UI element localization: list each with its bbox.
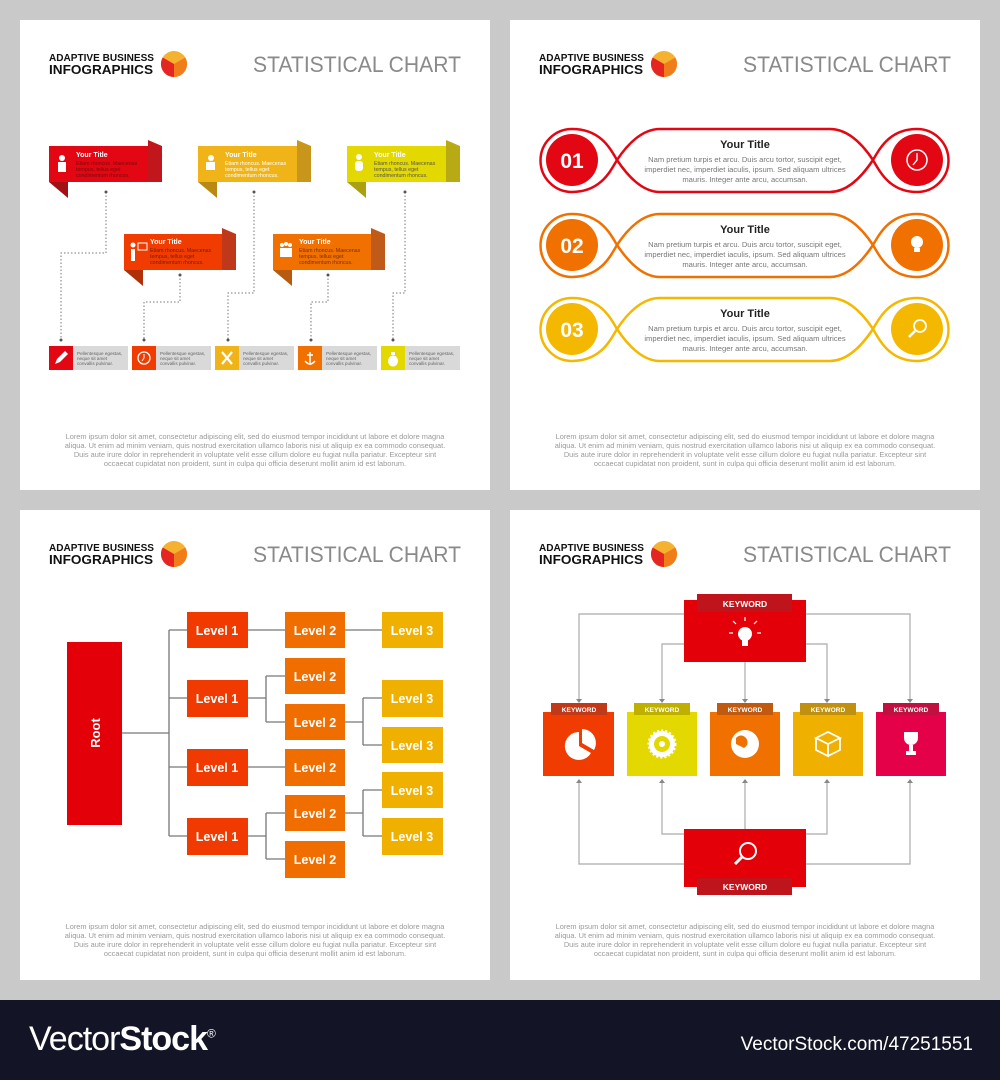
step 03 bbox=[540, 298, 948, 361]
ribbon 2 amber: condimentum rhoncus. bbox=[225, 173, 279, 179]
step 01: 01 bbox=[560, 150, 584, 173]
level boxes: Level 1 bbox=[196, 692, 238, 706]
ribbon 4 orange-red: tempus, tellus eget bbox=[150, 254, 195, 260]
step 03: Your Title bbox=[720, 308, 770, 320]
ribbon 5 orange: condimentum rhoncus. bbox=[299, 260, 353, 266]
mid keyword boxes: KEYWORD bbox=[645, 707, 679, 714]
step 02: Your Title bbox=[720, 224, 770, 236]
bottom legend items: neque sit amet bbox=[326, 356, 357, 361]
bottom legend items: neque sit amet bbox=[160, 356, 191, 361]
panel: keyword flow bbox=[510, 510, 980, 980]
level boxes: Level 2 bbox=[294, 807, 336, 821]
ribbon 5 orange: Your Title bbox=[299, 239, 331, 246]
heading: STATISTICAL CHART bbox=[743, 542, 951, 567]
footer text: Lorem ipsum dolor sit amet, consectetur adipiscing elit, sed do eiusmod tempor incididunt ut labore et dolore magna bbox=[556, 922, 935, 931]
root bbox=[67, 642, 122, 825]
ribbon 3 yellow: Your Title bbox=[374, 152, 406, 159]
connectors bbox=[122, 630, 382, 859]
step 01: Nam pretium turpis et arcu. Duis arcu tortor, suscipit eget, bbox=[648, 155, 842, 164]
ribbon 4 orange-red: condimentum rhoncus. bbox=[150, 260, 204, 266]
bottom legend items: convallis pulvinar. bbox=[243, 361, 279, 366]
footer text bbox=[65, 922, 445, 958]
bottom keyword box: KEYWORD bbox=[723, 882, 767, 892]
ribbon 1 red: Your Title bbox=[76, 152, 108, 159]
bottom legend items: neque sit amet bbox=[77, 356, 108, 361]
mid keyword boxes: KEYWORD bbox=[894, 707, 928, 714]
ribbon 4 orange-red: Etiam rhoncus. Maecenas bbox=[150, 248, 212, 254]
step 01: Your Title bbox=[720, 139, 770, 151]
footer text: occaecat cupidatat non proident, sunt in culpa qui officia deserunt mollit anim id est laborum. bbox=[594, 949, 896, 958]
level boxes: Level 2 bbox=[294, 670, 336, 684]
footer text: Lorem ipsum dolor sit amet, consectetur adipiscing elit, sed do eiusmod tempor incididunt ut labore et dolore magna bbox=[556, 432, 935, 441]
panel: infinity steps bbox=[510, 20, 980, 490]
step 01: mauris. Integer ante arcu, accumsan. bbox=[682, 175, 808, 184]
watermark bar bbox=[0, 1000, 1000, 1080]
step 03: Nam pretium turpis et arcu. Duis arcu tortor, suscipit eget, bbox=[648, 324, 842, 333]
footer text: aliqua. Ut enim ad minim veniam, quis nostrud exercitation ullamco laboris nisi ut aliquip ex ea commodo consequat. bbox=[555, 441, 935, 450]
heading: STATISTICAL CHART bbox=[253, 542, 461, 567]
ribbon 3 yellow: Etiam rhoncus. Maecenas bbox=[374, 161, 436, 167]
level boxes: Level 1 bbox=[196, 761, 238, 775]
level boxes: Level 3 bbox=[391, 830, 433, 844]
header logo: ADAPTIVE BUSINESS bbox=[539, 53, 644, 64]
bottom legend items: Pellentesque egestas, bbox=[77, 351, 122, 356]
header logo: ADAPTIVE BUSINESS bbox=[49, 53, 154, 64]
footer text: occaecat cupidatat non proident, sunt in culpa qui officia deserunt mollit anim id est laborum. bbox=[104, 459, 406, 468]
level boxes: Level 1 bbox=[196, 830, 238, 844]
step 03: 03 bbox=[560, 319, 584, 342]
footer text: Lorem ipsum dolor sit amet, consectetur adipiscing elit, sed do eiusmod tempor incididunt ut labore et dolore magna bbox=[66, 922, 445, 931]
footer text: aliqua. Ut enim ad minim veniam, quis nostrud exercitation ullamco laboris nisi ut aliquip ex ea commodo consequat. bbox=[65, 931, 445, 940]
bottom legend items: convallis pulvinar. bbox=[409, 361, 445, 366]
step 02: imperdiet nec, imperdiet iaculis, ipsum. Sed aliquam ultrices bbox=[644, 250, 846, 259]
bottom legend items: convallis pulvinar. bbox=[77, 361, 113, 366]
bottom legend items: Pellentesque egestas, bbox=[160, 351, 205, 356]
ribbon 5 orange: Etiam rhoncus. Maecenas bbox=[299, 248, 361, 254]
step 02 bbox=[540, 214, 948, 277]
header logo: ADAPTIVE BUSINESS bbox=[49, 543, 154, 554]
level boxes bbox=[187, 612, 443, 878]
ribbon 1 red: Etiam rhoncus. Maecenas bbox=[76, 161, 138, 167]
heading: STATISTICAL CHART bbox=[743, 52, 951, 77]
panel: ribbon timeline bbox=[20, 20, 490, 490]
header logo bbox=[539, 51, 677, 77]
bottom legend items: neque sit amet bbox=[409, 356, 440, 361]
ribbon 1 red bbox=[49, 140, 162, 198]
ribbon 3 yellow: condimentum rhoncus. bbox=[374, 173, 428, 179]
mid keyword boxes: KEYWORD bbox=[562, 707, 596, 714]
watermark logo: VectorStock® bbox=[29, 1020, 215, 1058]
panel: tree hierarchy bbox=[20, 510, 490, 980]
footer text bbox=[65, 432, 445, 468]
footer text: occaecat cupidatat non proident, sunt in culpa qui officia deserunt mollit anim id est laborum. bbox=[104, 949, 406, 958]
bottom legend items: neque sit amet bbox=[243, 356, 274, 361]
heading: STATISTICAL CHART bbox=[253, 52, 461, 77]
footer text: Duis aute irure dolor in reprehenderit in voluptate velit esse cillum dolore eu fugiat nulla pariatur. Excepteur sint bbox=[74, 450, 436, 459]
step 02: Nam pretium turpis et arcu. Duis arcu tortor, suscipit eget, bbox=[648, 240, 842, 249]
footer text bbox=[555, 432, 935, 468]
header logo bbox=[539, 541, 677, 567]
header logo: ADAPTIVE BUSINESS bbox=[539, 543, 644, 554]
bottom legend items: convallis pulvinar. bbox=[326, 361, 362, 366]
footer text: occaecat cupidatat non proident, sunt in culpa qui officia deserunt mollit anim id est laborum. bbox=[594, 459, 896, 468]
footer text: aliqua. Ut enim ad minim veniam, quis nostrud exercitation ullamco laboris nisi ut aliquip ex ea commodo consequat. bbox=[65, 441, 445, 450]
step 03: mauris. Integer ante arcu, accumsan. bbox=[682, 344, 808, 353]
header logo: INFOGRAPHICS bbox=[49, 552, 153, 567]
header logo bbox=[49, 51, 187, 77]
footer text bbox=[555, 922, 935, 958]
bottom legend items: Pellentesque egestas, bbox=[243, 351, 288, 356]
bottom legend items: Pellentesque egestas, bbox=[409, 351, 454, 356]
root: Root bbox=[88, 718, 103, 748]
mid keyword boxes: KEYWORD bbox=[728, 707, 762, 714]
mid keyword boxes: KEYWORD bbox=[811, 707, 845, 714]
bottom legend items: Pellentesque egestas, bbox=[326, 351, 371, 356]
ribbon 4 orange-red bbox=[124, 228, 236, 286]
watermark url: VectorStock.com/47251551 bbox=[741, 1034, 973, 1055]
footer text: Duis aute irure dolor in reprehenderit in voluptate velit esse cillum dolore eu fugiat nulla pariatur. Excepteur sint bbox=[564, 450, 926, 459]
step 01 bbox=[540, 129, 948, 192]
mid keyword boxes bbox=[543, 703, 946, 776]
footer text: Duis aute irure dolor in reprehenderit in voluptate velit esse cillum dolore eu fugiat nulla pariatur. Excepteur sint bbox=[74, 940, 436, 949]
header logo bbox=[49, 541, 187, 567]
ribbon 5 orange bbox=[273, 228, 385, 286]
ribbon 2 amber bbox=[198, 140, 311, 198]
step 01: imperdiet nec, imperdiet iaculis, ipsum. Sed aliquam ultrices bbox=[644, 165, 846, 174]
bottom keyword box bbox=[684, 829, 806, 895]
ribbon 1 red: tempus, tellus eget bbox=[76, 167, 121, 173]
footer text: Lorem ipsum dolor sit amet, consectetur adipiscing elit, sed do eiusmod tempor incididunt ut labore et dolore magna bbox=[66, 432, 445, 441]
bottom legend items bbox=[49, 346, 460, 370]
header logo: INFOGRAPHICS bbox=[539, 62, 643, 77]
level boxes: Level 3 bbox=[391, 784, 433, 798]
level boxes: Level 3 bbox=[391, 624, 433, 638]
top keyword box: KEYWORD bbox=[723, 599, 767, 609]
level boxes: Level 3 bbox=[391, 692, 433, 706]
level boxes: Level 1 bbox=[196, 624, 238, 638]
header logo: INFOGRAPHICS bbox=[539, 552, 643, 567]
level boxes: Level 2 bbox=[294, 716, 336, 730]
footer text: aliqua. Ut enim ad minim veniam, quis nostrud exercitation ullamco laboris nisi ut aliquip ex ea commodo consequat. bbox=[555, 931, 935, 940]
step 02: mauris. Integer ante arcu, accumsan. bbox=[682, 260, 808, 269]
bottom legend items: convallis pulvinar. bbox=[160, 361, 196, 366]
top keyword box bbox=[684, 594, 806, 662]
ribbon 2 amber: tempus, tellus eget bbox=[225, 167, 270, 173]
ribbon 2 amber: Etiam rhoncus. Maecenas bbox=[225, 161, 287, 167]
level boxes: Level 2 bbox=[294, 624, 336, 638]
step 03: imperdiet nec, imperdiet iaculis, ipsum. Sed aliquam ultrices bbox=[644, 334, 846, 343]
dotted connectors bbox=[61, 192, 405, 340]
ribbon 4 orange-red: Your Title bbox=[150, 239, 182, 246]
header logo: INFOGRAPHICS bbox=[49, 62, 153, 77]
ribbon 3 yellow: tempus, tellus eget bbox=[374, 167, 419, 173]
ribbon 2 amber: Your Title bbox=[225, 152, 257, 159]
level boxes: Level 2 bbox=[294, 853, 336, 867]
ribbon 5 orange: tempus, tellus eget bbox=[299, 254, 344, 260]
level boxes: Level 3 bbox=[391, 739, 433, 753]
arrows bbox=[579, 614, 910, 864]
footer text: Duis aute irure dolor in reprehenderit in voluptate velit esse cillum dolore eu fugiat nulla pariatur. Excepteur sint bbox=[564, 940, 926, 949]
ribbon 1 red: condimentum rhoncus. bbox=[76, 173, 130, 179]
level boxes: Level 2 bbox=[294, 761, 336, 775]
ribbon 3 yellow bbox=[347, 140, 460, 198]
step 02: 02 bbox=[560, 235, 584, 258]
